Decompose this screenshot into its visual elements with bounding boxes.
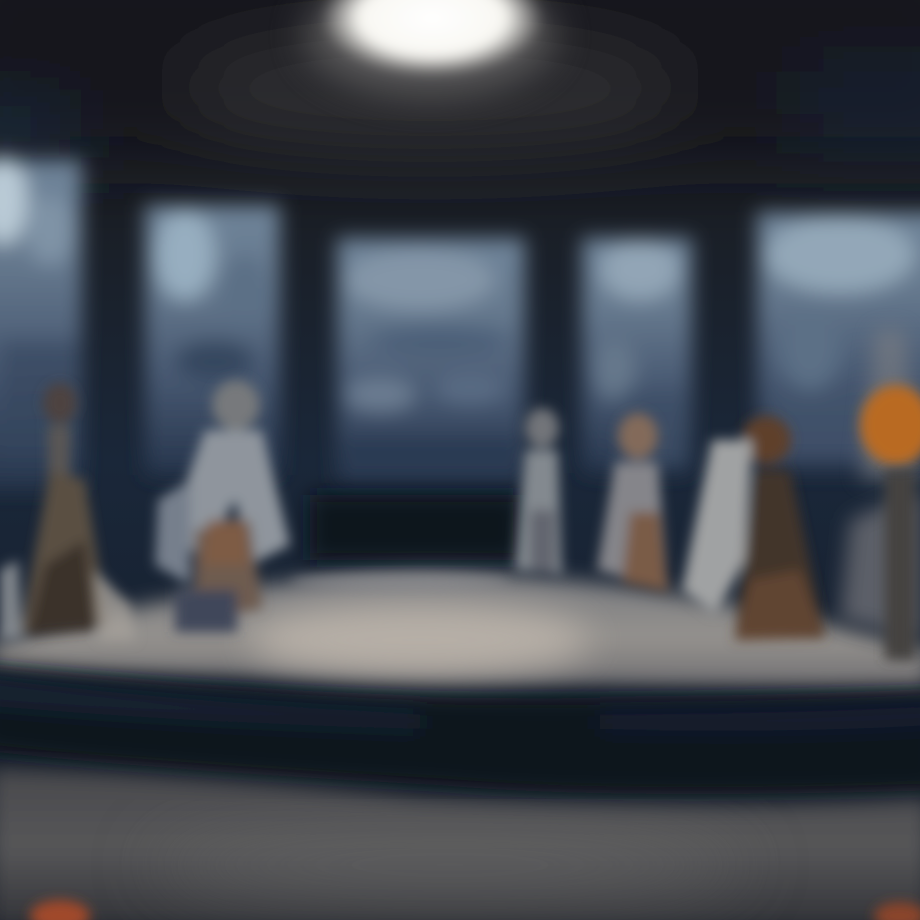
window: far right xyxy=(757,212,920,472)
ceiling xyxy=(0,0,920,160)
figure: right tan xyxy=(597,413,668,592)
figure: far left xyxy=(0,383,135,640)
figure: right white and brown xyxy=(682,416,825,640)
window: left xyxy=(145,205,280,475)
orange flask xyxy=(840,330,920,660)
window: centre xyxy=(337,238,525,483)
floor xyxy=(0,768,920,920)
figure: centre right white xyxy=(515,408,562,575)
orange spot: bottom left xyxy=(30,900,90,920)
table front edge xyxy=(0,665,920,794)
figure: left xyxy=(155,380,290,632)
wall base below windows xyxy=(310,495,520,560)
ceiling light xyxy=(305,0,555,95)
window: right xyxy=(582,238,692,473)
window: far left xyxy=(0,156,82,490)
orange spot: bottom right xyxy=(874,902,920,920)
table surface xyxy=(0,572,920,692)
